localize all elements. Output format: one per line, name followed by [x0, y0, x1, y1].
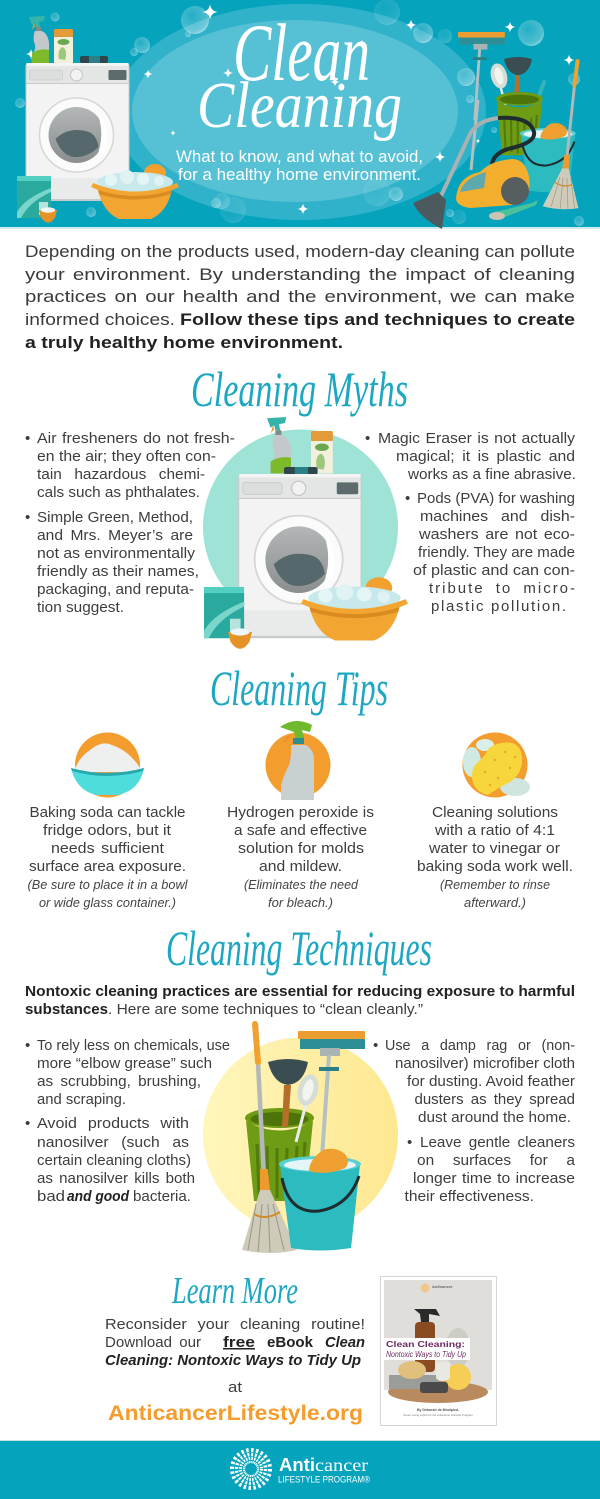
text: myths left column: en the air; they often con-: [37, 448, 216, 465]
tip: hydrogen peroxide: Hydrogen peroxide is: [227, 804, 374, 821]
ebook cover: [380, 1276, 496, 1426]
text: myths right column: tribute to micro-: [429, 580, 575, 597]
panel: cleaning techniques: [25, 920, 576, 1253]
ebook cover: Nontoxic Ways to Tidy Up: [386, 1350, 466, 1359]
text: myths left column: and Mrs. Meyer’s are: [37, 527, 193, 544]
text: myths right column: machines and dish-: [420, 508, 575, 525]
heading: cleaning techniques: Cleaning Techniques: [166, 920, 432, 976]
subtitle: [176, 147, 423, 184]
tip: cleaning solutions: with a ratio of 4:1: [434, 822, 555, 839]
text: techniques left column: bacteria.: [133, 1188, 191, 1205]
tip: cleaning solutions: [417, 732, 573, 910]
tip: cleaning solutions: baking soda work well.: [417, 858, 573, 875]
intro paragraph: informed choices.: [25, 310, 175, 329]
text: techniques right column: Leave gentle cleaners: [420, 1134, 575, 1151]
text: myths right column: •: [405, 490, 410, 507]
heading: learn more: Learn More: [171, 1270, 298, 1312]
icon: sponge with foam: [462, 732, 530, 798]
title: Clean: [233, 7, 370, 98]
tip: baking soda: needs sufficient: [51, 840, 165, 857]
heading: cleaning myths: Cleaning Myths: [191, 361, 408, 417]
text: techniques introduction: . Here are some techniques to “clean cleanly.”: [108, 1001, 423, 1018]
tip: baking soda: (Be sure to place it in a bowl: [28, 877, 189, 892]
ebook cover: Green Living expert for the Anticancer Lifestyle Program: [403, 1413, 473, 1417]
header banner: [0, 0, 600, 229]
banner ellipse: [114, 4, 486, 220]
text: ebook call to action: Reconsider your cleaning routine!: [105, 1316, 365, 1333]
icon: mop, buckets and vacuum: [413, 32, 586, 229]
ebook cover: Anticancer: [432, 1284, 453, 1289]
text: ebook call to action: Download our: [105, 1334, 201, 1351]
text: techniques right column: for dusting. Avoid feather: [407, 1073, 575, 1090]
text: myths right column: Pods (PVA) for washing: [417, 490, 575, 507]
sparkles: [26, 4, 574, 214]
panel: cleaning tips: [28, 660, 573, 910]
soap bubbles: [15, 0, 584, 226]
text: myths right column: plastic pollution.: [431, 598, 566, 615]
text: techniques introduction: substances: [25, 1001, 108, 1018]
tip: hydrogen peroxide: solution for molds: [238, 840, 364, 857]
tip: hydrogen peroxide: a safe and effective: [234, 822, 367, 839]
logo wordmark: LIFESTYLE PROGRAM®: [278, 1474, 370, 1484]
heading: cleaning tips: Cleaning Tips: [210, 660, 388, 716]
ebook cover: By Deborah de Moulpied,: [417, 1408, 459, 1412]
text: techniques introduction: Nontoxic cleaning practices are essential for reducing exposure to harmful: [25, 983, 575, 1000]
text: myths right column: magical; it is plastic and: [396, 448, 575, 465]
logo mark: [232, 1450, 270, 1488]
text: techniques right column: their effectiveness.: [404, 1188, 534, 1205]
text: ebook call to action: at: [228, 1379, 243, 1396]
text: techniques left column: •: [25, 1037, 30, 1054]
link: website: AnticancerLifestyle.org: [108, 1402, 363, 1425]
text: techniques right column: •: [373, 1037, 378, 1054]
text: techniques right column: on surfaces for a: [417, 1152, 576, 1169]
text: myths left column: •: [25, 430, 30, 447]
text: techniques right column: nanosilver) microfiber cloth: [395, 1055, 575, 1072]
intro paragraph: a truly healthy home environment.: [25, 333, 343, 352]
text: techniques left column: certain cleaning cloths): [37, 1152, 191, 1169]
text: techniques right column: dust around the home.: [418, 1109, 571, 1126]
text: techniques left column: as nanosilver kills both: [37, 1170, 195, 1187]
text: myths left column: [25, 430, 235, 616]
text: myths left column: tain hazardous chemi-: [37, 466, 205, 483]
text: myths right column: washers are not eco-: [418, 526, 575, 543]
text: myths left column: Simple Green, Method,: [37, 509, 193, 526]
tip: hydrogen peroxide: for bleach.): [268, 895, 333, 910]
tip: baking soda: or wide glass container.): [39, 895, 176, 910]
panel: cleaning myths: [25, 361, 576, 649]
illustration: washing machine: [203, 417, 408, 649]
tip: cleaning solutions: Cleaning solutions: [432, 804, 558, 821]
tip: cleaning solutions: (Remember to rinse: [440, 877, 550, 892]
text: ebook call to action: [105, 1316, 365, 1396]
text: techniques right column: •: [407, 1134, 412, 1151]
text: ebook call to action: eBook: [267, 1334, 314, 1351]
intro paragraph: [25, 242, 575, 352]
text: myths left column: packaging, and reputa-: [37, 581, 194, 598]
text: techniques introduction: [25, 983, 575, 1018]
text: techniques left column: •: [25, 1115, 30, 1132]
text: techniques right column: Use a damp rag or (non-: [385, 1037, 575, 1054]
text: techniques left column: and scraping.: [37, 1091, 126, 1108]
text: techniques left column: bad: [37, 1188, 65, 1205]
text: techniques right column: [373, 1037, 576, 1205]
text: techniques right column: longer time to increase: [413, 1170, 575, 1187]
tip: baking soda: surface area exposure.: [29, 858, 186, 875]
intro paragraph: Depending on the products used, modern-day cleaning can pollute: [25, 242, 575, 261]
icon: baking soda bowl: [71, 732, 144, 798]
tip: baking soda: Baking soda can tackle: [30, 804, 186, 821]
footer band: [0, 1440, 600, 1499]
logo wordmark: Anti: [279, 1455, 315, 1475]
intro paragraph: your environment. By understanding the impact of cleaning: [25, 265, 575, 284]
text: techniques left column: [25, 1037, 230, 1205]
text: techniques left column: To rely less on chemicals, use: [37, 1037, 230, 1054]
text: myths left column: tion suggest.: [37, 599, 124, 616]
text: techniques left column: as scrubbing, brushing,: [37, 1073, 201, 1090]
text: myths right column: Magic Eraser is not actually: [378, 430, 576, 447]
text: techniques left column: Avoid products with: [37, 1115, 189, 1132]
text: techniques left column: and good: [67, 1188, 130, 1205]
text: myths left column: not as environmentally: [37, 545, 196, 562]
text: myths right column: works as a fine abrasive.: [407, 466, 576, 483]
tip: cleaning solutions: water to vinegar or: [428, 840, 560, 857]
text: myths right column: of plastic and can con-: [413, 562, 575, 579]
icon: spray bottle: [266, 721, 330, 800]
text: myths right column: [365, 430, 576, 615]
tip: baking soda: fridge odors, but it: [43, 822, 172, 839]
text: myths left column: Air fresheners do not fresh-: [37, 430, 235, 447]
text: techniques left column: nanosilver (such as: [37, 1134, 189, 1151]
tip: hydrogen peroxide: [227, 721, 374, 910]
tip: hydrogen peroxide: (Eliminates the need: [244, 877, 359, 892]
subtitle: What to know, and what to avoid,: [176, 147, 423, 166]
tip: hydrogen peroxide: and mildew.: [259, 858, 342, 875]
text: ebook call to action: Clean: [325, 1334, 365, 1351]
text: myths left column: •: [25, 509, 30, 526]
text: techniques left column: more “elbow grease” such: [37, 1055, 212, 1072]
panel: learn more: [105, 1270, 496, 1426]
intro paragraph: Follow these tips and techniques to create: [180, 310, 575, 329]
text: myths right column: friendly. They are made: [418, 544, 575, 561]
logo wordmark: cancer: [315, 1455, 368, 1475]
title: Cleaning: [197, 69, 402, 142]
text: techniques right column: dusters as they spread: [414, 1091, 575, 1108]
text: ebook call to action: Cleaning: Nontoxic Ways to Tidy Up: [105, 1352, 361, 1369]
subtitle: for a healthy home environment.: [178, 165, 421, 184]
intro paragraph: practices on our health and the environment, we can make: [25, 287, 575, 306]
text: myths left column: friendly as their names,: [37, 563, 199, 580]
ebook cover: Clean Cleaning:: [386, 1339, 465, 1349]
illustration: cleaning tools: [203, 1024, 398, 1253]
tip: baking soda: [28, 732, 189, 910]
icon: washing machine with supplies: [17, 16, 179, 223]
logo wordmark: [278, 1455, 370, 1484]
tip: cleaning solutions: afterward.): [464, 895, 526, 910]
title: [197, 7, 402, 142]
text: myths left column: cals such as phthalates.: [37, 484, 200, 501]
text: ebook call to action: free: [223, 1334, 255, 1351]
text: myths right column: •: [365, 430, 370, 447]
